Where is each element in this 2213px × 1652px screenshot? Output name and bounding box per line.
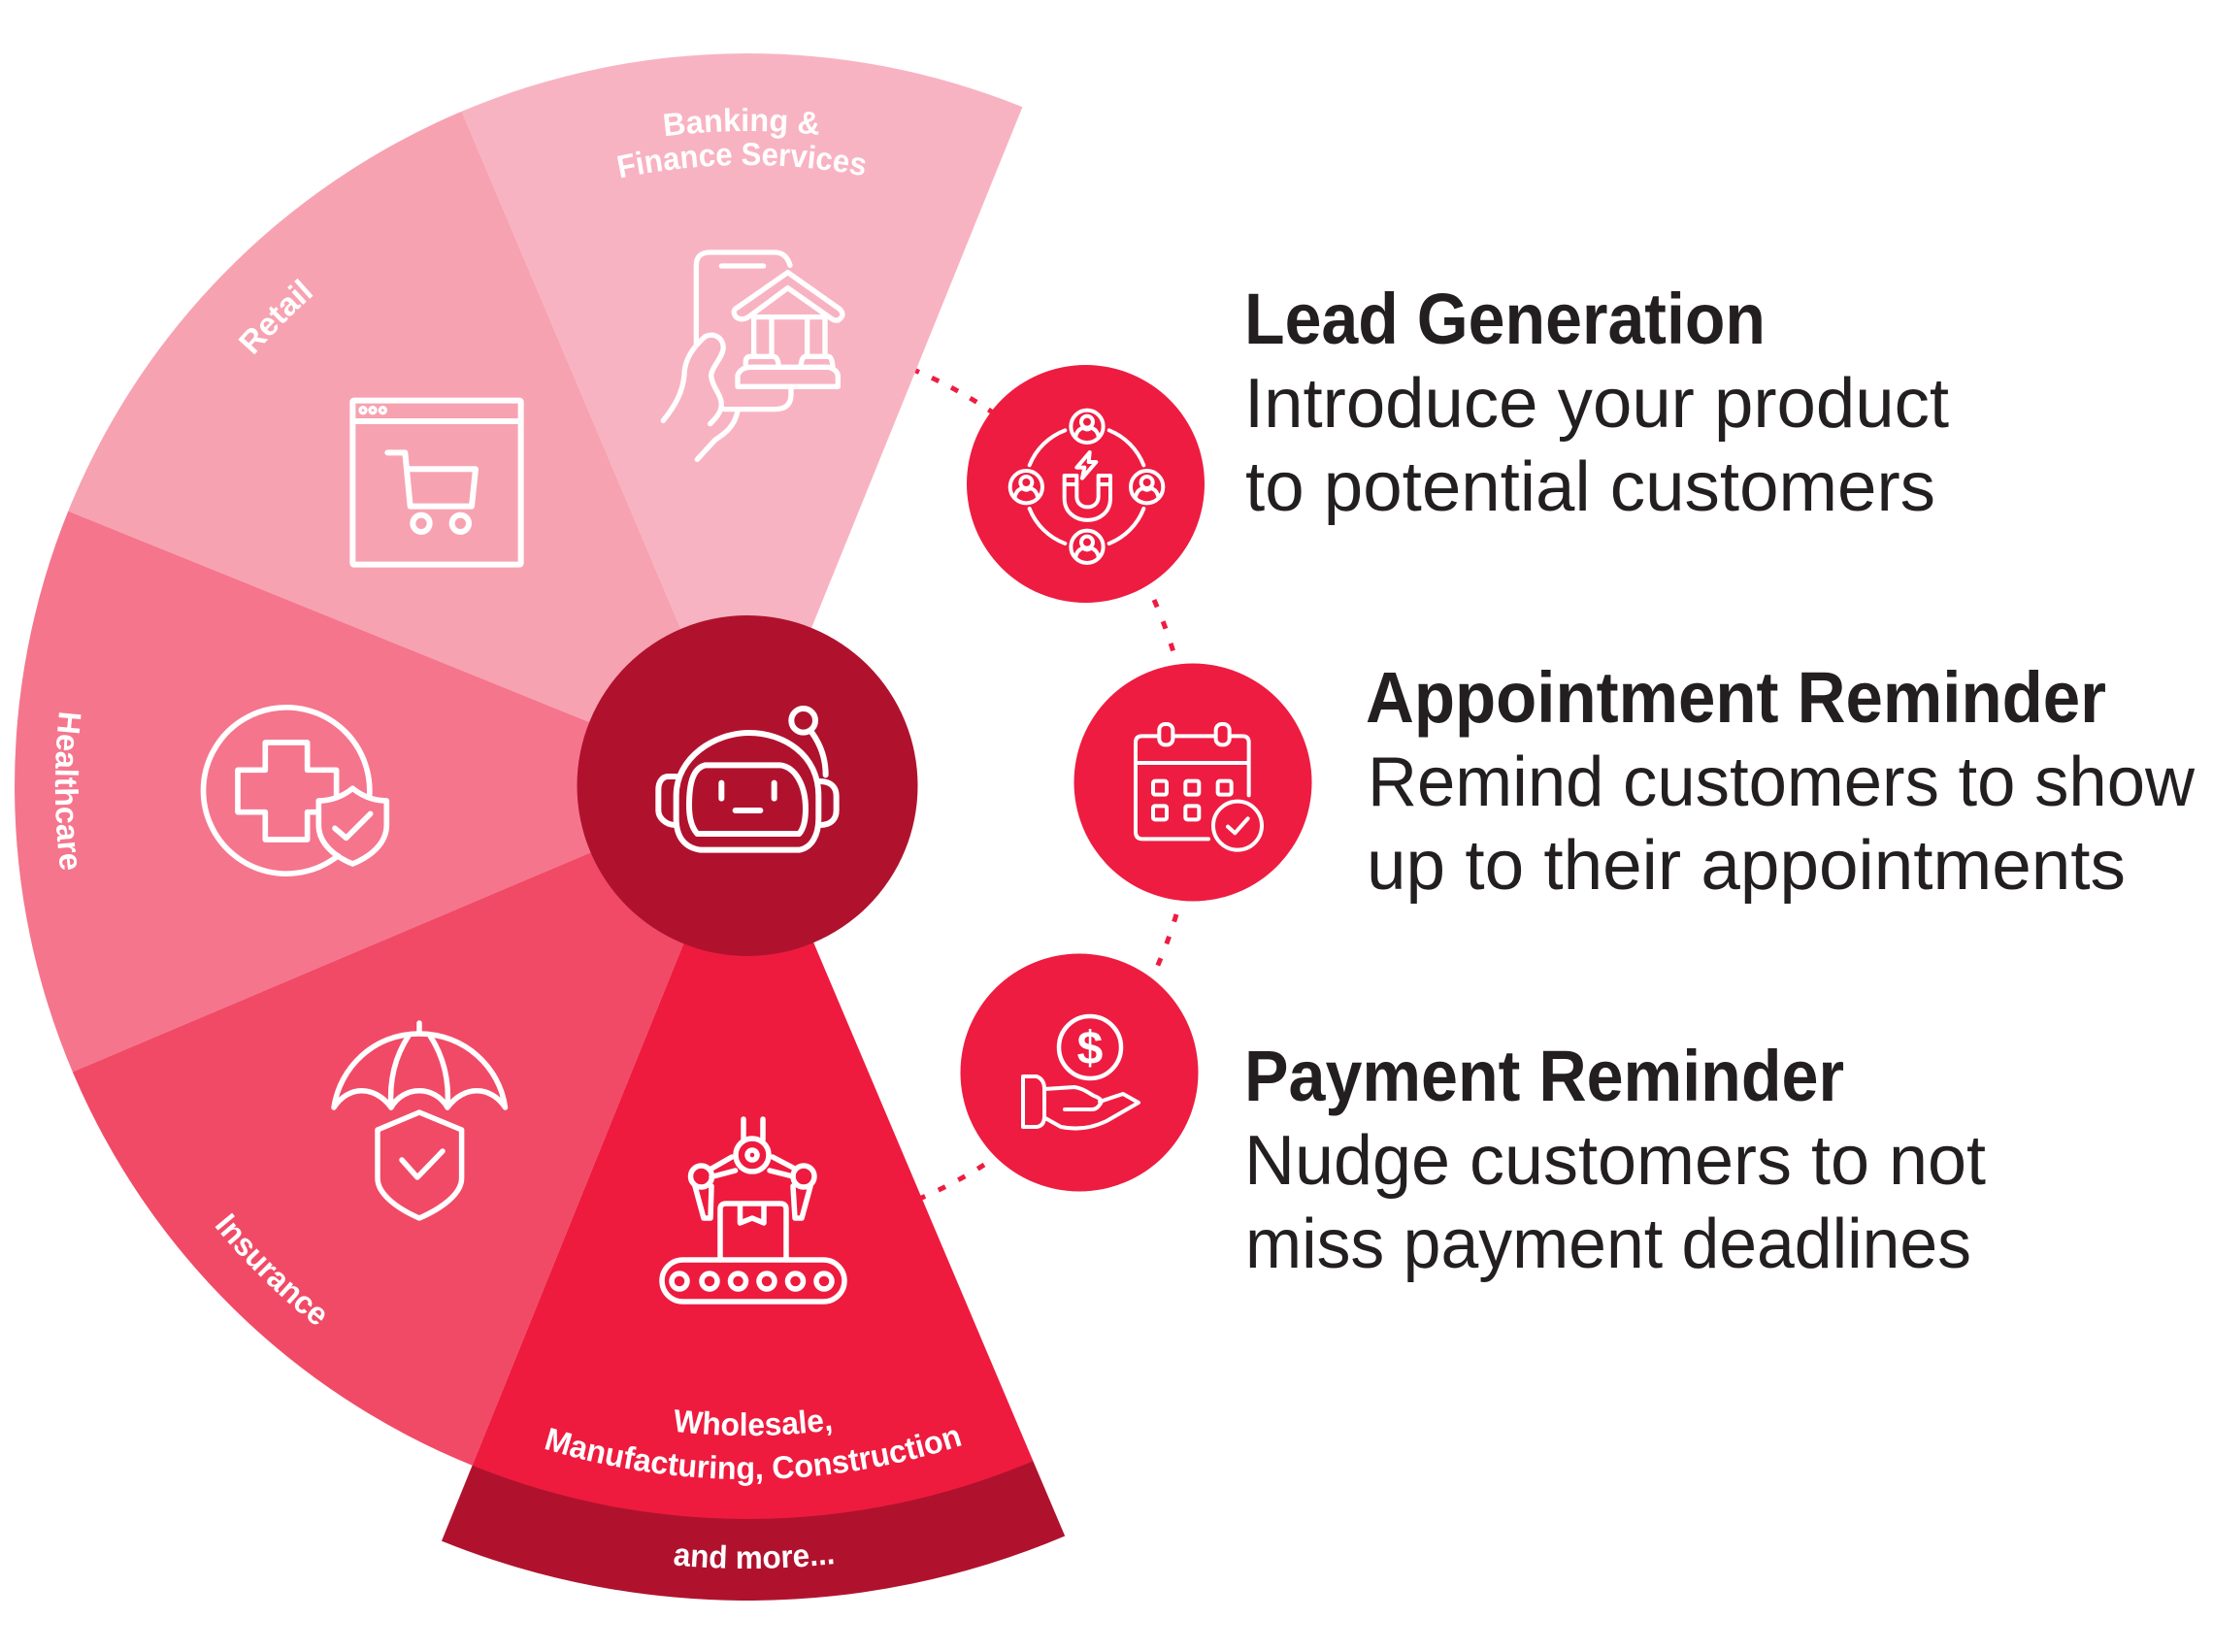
use case: lead generation: [967, 279, 1949, 603]
wedge: wholesale: [467, 784, 1034, 1521]
panel: retail: [68, 111, 681, 722]
heading: lead generation: Lead Generation: [1244, 279, 1766, 359]
icon: robot: [658, 709, 837, 850]
wedge: healthcare: [13, 506, 749, 1073]
icon: medical cross with shield: [203, 708, 386, 874]
center hub: [577, 615, 918, 956]
icon: magnet attracting people: [1010, 411, 1163, 563]
panel: banking and finance services: [462, 53, 1023, 629]
coin: [1059, 1016, 1121, 1078]
icon: calendar with check: [1136, 724, 1262, 850]
wedge: and more band: [441, 1461, 1066, 1602]
circle: payment reminder: [961, 953, 1198, 1192]
panel: insurance: [72, 852, 683, 1466]
icon: umbrella with shield: [334, 1023, 505, 1218]
icon: robot arm over conveyor: [662, 1119, 844, 1302]
hand: [1023, 1076, 1139, 1129]
text: payment reminder line 2: miss payment deadlines: [1245, 1206, 1971, 1283]
icon: hand with dollar coin: [1023, 1016, 1139, 1129]
icon: browser with cart: [352, 401, 521, 565]
text: appointment reminder line 2: up to their appointments: [1367, 827, 2126, 905]
label: retail: Retail: [239, 279, 313, 355]
use case: appointment reminder: [1073, 657, 2196, 905]
panel: healthcare: [15, 511, 590, 1072]
dotted connector: appointment reminder to payment reminder: [1136, 914, 1176, 1009]
dotted connector: payment reminder to wheel: [912, 1165, 984, 1202]
wedge: insurance: [71, 786, 752, 1469]
label: banking and finance services: Banking & Finance Services: [617, 108, 866, 179]
circle: appointment reminder: [1073, 664, 1312, 901]
label: insurance: Insurance: [215, 1213, 324, 1324]
hub circle: [577, 615, 918, 956]
label: and more: and more...: [674, 1545, 834, 1569]
label: healthcare: Healthcare: [54, 712, 82, 870]
dotted connector: wheel to lead generation: [912, 369, 1014, 428]
heading: appointment reminder: Appointment Reminder: [1366, 657, 2106, 738]
text: payment reminder line 1: Nudge customers to not: [1244, 1122, 1986, 1200]
text: appointment reminder line 1: Remind customers to show: [1368, 743, 2196, 821]
dotted connector: lead generation to appointment reminder: [1154, 600, 1178, 670]
use case: payment reminder: [961, 953, 1986, 1283]
heading: payment reminder: Payment Reminder: [1244, 1036, 1844, 1116]
circle: lead generation: [967, 365, 1205, 603]
text: lead generation line 1: Introduce your product: [1244, 365, 1949, 443]
text: lead generation line 2: to potential customers: [1245, 448, 1935, 526]
wedge: retail: [65, 110, 747, 791]
dollar sign: $: [1077, 1023, 1104, 1074]
label: wholesale, manufacturing, construction: Wholesale,Manufacturing, Construction: [545, 1409, 962, 1486]
icon: phone with bank: [663, 252, 842, 459]
panel: wholesale, manufacturing, construction: [442, 942, 1066, 1601]
wedge: banking: [461, 51, 1028, 788]
